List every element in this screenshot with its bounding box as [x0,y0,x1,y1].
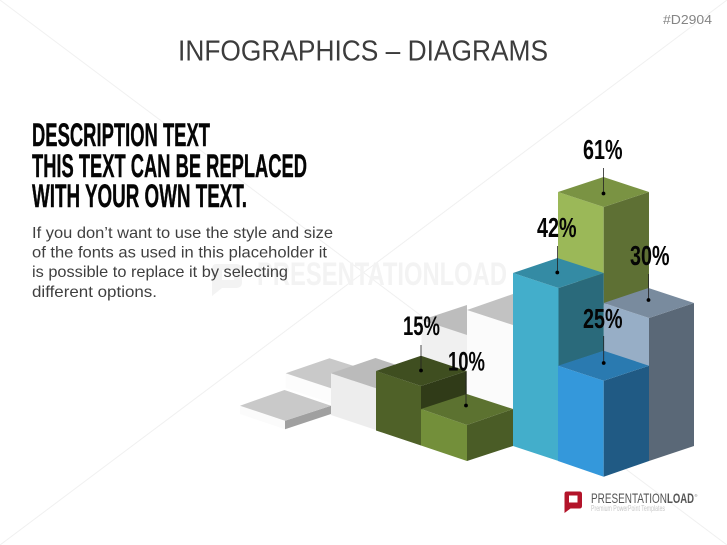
label: 42% [537,212,577,274]
label: 15% [403,311,440,372]
label: 25%: 25% [583,303,623,334]
document code: #D2904 [663,12,712,27]
watermark [212,256,507,296]
bar: 61% light green [558,177,649,305]
description text: If you don’t want to use the style and size [32,225,333,242]
label: 30%: 30% [630,240,670,271]
grey step: flat leftmost block [240,390,331,429]
label: 10%: 10% [448,346,485,376]
bar: 25% blue [558,351,649,477]
logo: PresentationLoad [564,490,698,513]
description text: is possible to replace it by selecting [32,264,288,281]
label: 61%: 61% [583,134,623,165]
label: 15%: 15% [403,311,440,341]
title: INFOGRAPHICS – DIAGRAMS [178,36,548,68]
label: 42%: 42% [537,212,577,243]
logo: PresentationLoad: LOAD [667,490,694,506]
icon: red speech-bubble P [564,492,582,513]
description text: of the fonts as used in this placeholder it [32,244,328,262]
label: 10% [448,346,485,407]
logo: PresentationLoad: PRESENTATION [591,490,667,506]
heading: WITH YOUR OWN TEXT. [32,178,247,214]
heading: THIS TEXT CAN BE REPLACED [32,148,307,184]
bar: 30% slate [604,288,694,461]
grey step: third block [331,358,421,430]
description text [32,225,333,301]
grey step: big back block [467,294,513,410]
label: 61% [583,134,623,195]
logo: PresentationLoad: ® [694,493,698,498]
grey step: second block [286,358,376,403]
bar: 42% teal [513,258,604,461]
3D stepped bar chart [240,177,694,477]
heading [32,117,307,214]
grey step: middle back block [422,305,467,380]
label: 30% [630,240,670,302]
bar: 10% mid green [421,394,513,461]
logo: PresentationLoad: Premium PowerPoint Templates [591,504,665,513]
description text: different options. [32,284,157,301]
heading: DESCRIPTION TEXT [32,117,210,153]
label: 25% [583,303,623,365]
bar: 15% dark green [376,356,467,446]
watermark: PRESENTATIONLOAD [257,256,507,292]
